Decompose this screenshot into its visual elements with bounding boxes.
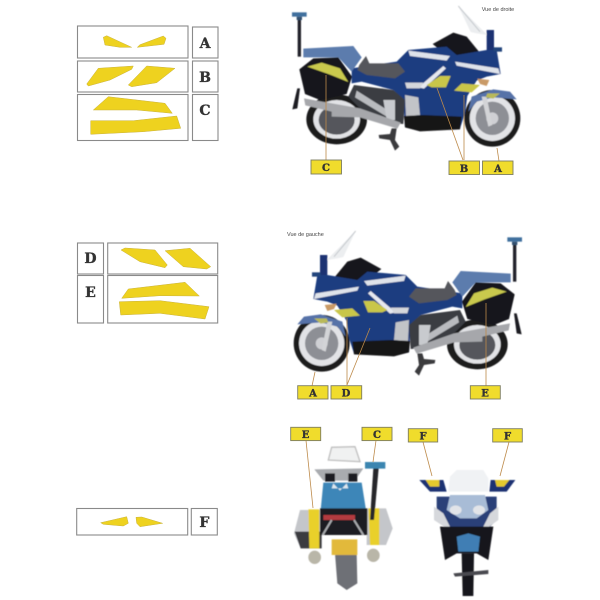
label F front view left: F <box>419 432 427 442</box>
label A right view <box>482 161 513 175</box>
label C right view: C <box>322 163 330 174</box>
label B right view: B <box>460 164 468 175</box>
decal box F <box>77 508 188 535</box>
letter B <box>192 61 218 92</box>
label D left view <box>331 386 362 400</box>
decal box A <box>78 26 188 58</box>
letter C <box>192 94 218 140</box>
label B right view <box>449 161 480 175</box>
panel: decal F <box>77 508 217 535</box>
label A left view <box>298 386 328 400</box>
caption: right view: Vue de droite <box>482 7 514 13</box>
letter A: A <box>199 36 212 52</box>
letter E: E <box>85 285 96 301</box>
label C rear view <box>362 427 392 441</box>
caption: left view: Vue de gauche <box>287 232 324 238</box>
letter A <box>192 27 218 58</box>
label C rear view: C <box>373 430 381 441</box>
label A right view: A <box>493 164 502 175</box>
letter F <box>191 508 217 535</box>
leader lines: left view <box>312 303 486 386</box>
label E rear view: E <box>302 430 310 441</box>
letter C: C <box>199 103 211 119</box>
leader lines: rear view <box>306 440 376 508</box>
decal box B <box>78 61 188 92</box>
letter B: B <box>199 70 211 86</box>
label D left view: D <box>342 388 351 400</box>
label A left view: A <box>308 388 317 400</box>
decal box C <box>78 94 188 140</box>
letter D <box>78 243 104 274</box>
leader lines: right view <box>326 75 499 161</box>
panel: decals D E <box>78 243 218 323</box>
label F front view left <box>408 429 438 442</box>
label F front view right: F <box>504 432 511 442</box>
letter D: D <box>84 251 97 267</box>
label F front view right <box>493 429 522 442</box>
leader lines: front view <box>423 442 509 476</box>
label E left view <box>470 386 500 400</box>
panel: decals A B C <box>78 26 218 140</box>
decal box E <box>108 276 218 323</box>
letter F: F <box>199 515 209 531</box>
label E rear view <box>291 427 321 441</box>
motorcycle: right view <box>292 6 520 151</box>
motorcycle: rear view <box>294 447 393 590</box>
decal box D <box>108 243 218 274</box>
label E left view: E <box>481 388 489 400</box>
motorcycle: front view <box>419 470 515 596</box>
letter E <box>78 276 104 323</box>
label C right view <box>311 160 342 174</box>
motorcycle: left view <box>294 231 522 376</box>
